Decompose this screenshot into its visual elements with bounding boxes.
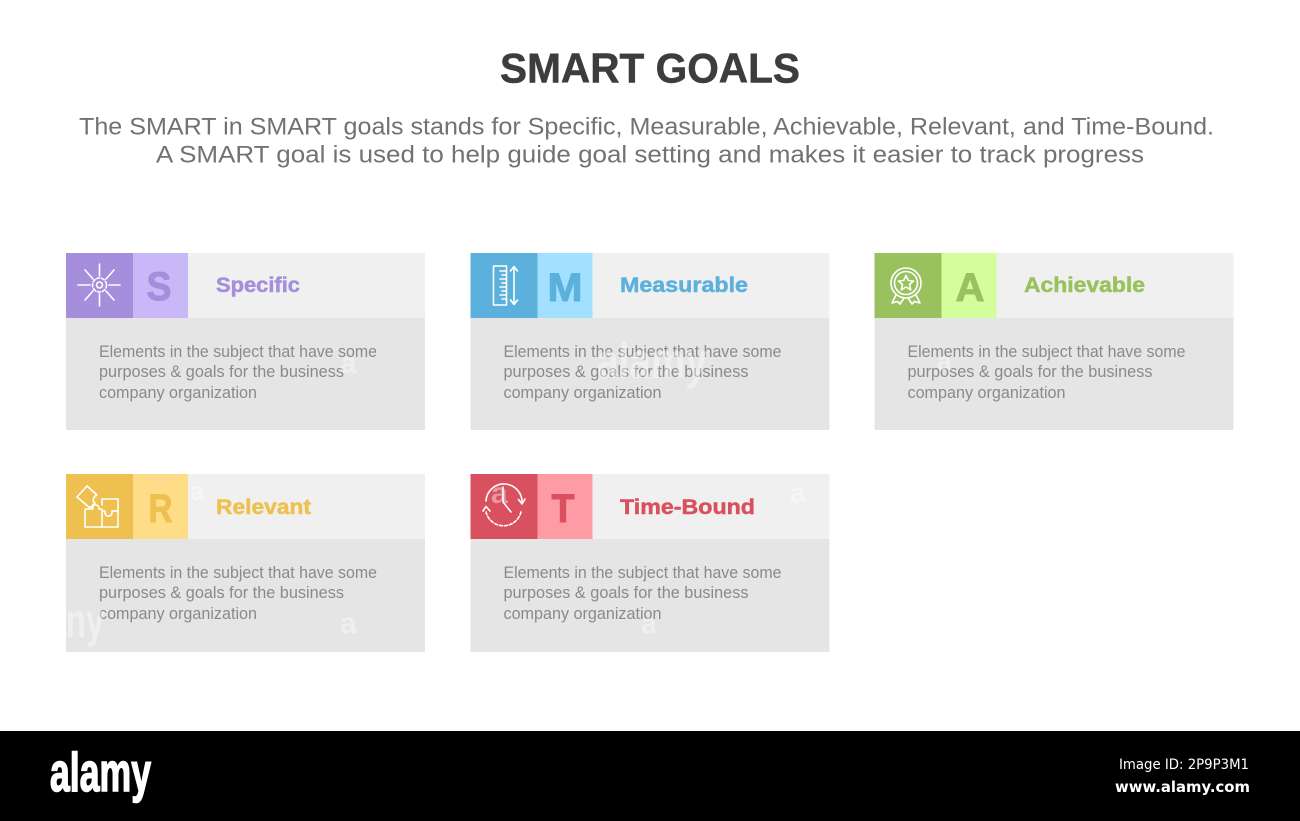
icon: award ribbon	[891, 268, 921, 304]
watermark fragment: a	[190, 476, 205, 506]
body text: Elements in the subject that have some	[99, 343, 377, 361]
icon: puzzle pieces	[77, 486, 118, 527]
body text	[99, 564, 377, 623]
body text: purposes & goals for the business	[504, 584, 748, 602]
body text	[504, 343, 782, 402]
panel: achievable	[874, 253, 1234, 430]
subtitle text: A SMART goal is used to help guide goal setting and makes it easier to track progress	[156, 142, 1144, 168]
letter T: T	[552, 487, 574, 531]
subtitle text	[79, 114, 1214, 168]
body text: purposes & goals for the business	[99, 363, 344, 381]
body text: company organization	[908, 384, 1066, 402]
letter S: S	[146, 265, 172, 309]
body text	[908, 343, 1186, 402]
icon: target burst	[78, 264, 120, 306]
body text: company organization	[99, 384, 257, 402]
body text	[99, 343, 377, 402]
watermark fragment: alamy	[597, 333, 707, 389]
footer bar	[0, 731, 1300, 821]
watermark fragment: ny	[66, 595, 104, 648]
panel: relevant	[66, 474, 425, 652]
body text: company organization	[504, 384, 662, 402]
letter M: M	[548, 266, 582, 310]
watermark fragment: a	[491, 477, 508, 510]
body text: Elements in the subject that have some	[504, 343, 782, 361]
title: SMART GOALS	[500, 44, 800, 92]
watermark fragment: a	[641, 608, 657, 639]
heading: Specific: Specific	[216, 274, 300, 297]
body text	[504, 564, 782, 623]
heading: Relevant: Relevant	[216, 496, 311, 519]
watermark fragment: a	[790, 477, 806, 508]
heading: Time-Bound: Time-Bound	[620, 496, 755, 519]
heading: Measurable: Measurable	[620, 274, 748, 297]
watermark fragment: a	[937, 346, 952, 376]
body text: Elements in the subject that have some	[908, 343, 1186, 361]
subtitle text: The SMART in SMART goals stands for Specific, Measurable, Achievable, Relevant, and Time-Bound.	[79, 114, 1214, 140]
website: www.alamy.com	[1115, 778, 1250, 796]
body text: Elements in the subject that have some	[99, 564, 377, 582]
panel: specific	[66, 253, 425, 430]
watermark fragment: a	[340, 607, 357, 640]
body text: purposes & goals for the business	[908, 363, 1152, 381]
icon: clock with arrows	[483, 484, 525, 526]
watermark fragment: a	[340, 347, 357, 380]
heading: Achievable: Achievable	[1024, 274, 1145, 297]
body text: Elements in the subject that have some	[504, 564, 782, 582]
body text: purposes & goals for the business	[504, 363, 748, 381]
letter A: A	[956, 266, 984, 310]
panel: time-bound	[470, 474, 830, 652]
image id: Image ID: 2P9P3M1	[1119, 757, 1249, 773]
logo: alamy: alamy	[50, 741, 151, 803]
body text: purposes & goals for the business	[99, 584, 344, 602]
letter R: R	[148, 487, 173, 531]
body text: company organization	[99, 605, 257, 623]
icon: ruler and arrow	[494, 266, 518, 305]
body text: company organization	[504, 605, 662, 623]
panel: measurable	[470, 253, 830, 430]
